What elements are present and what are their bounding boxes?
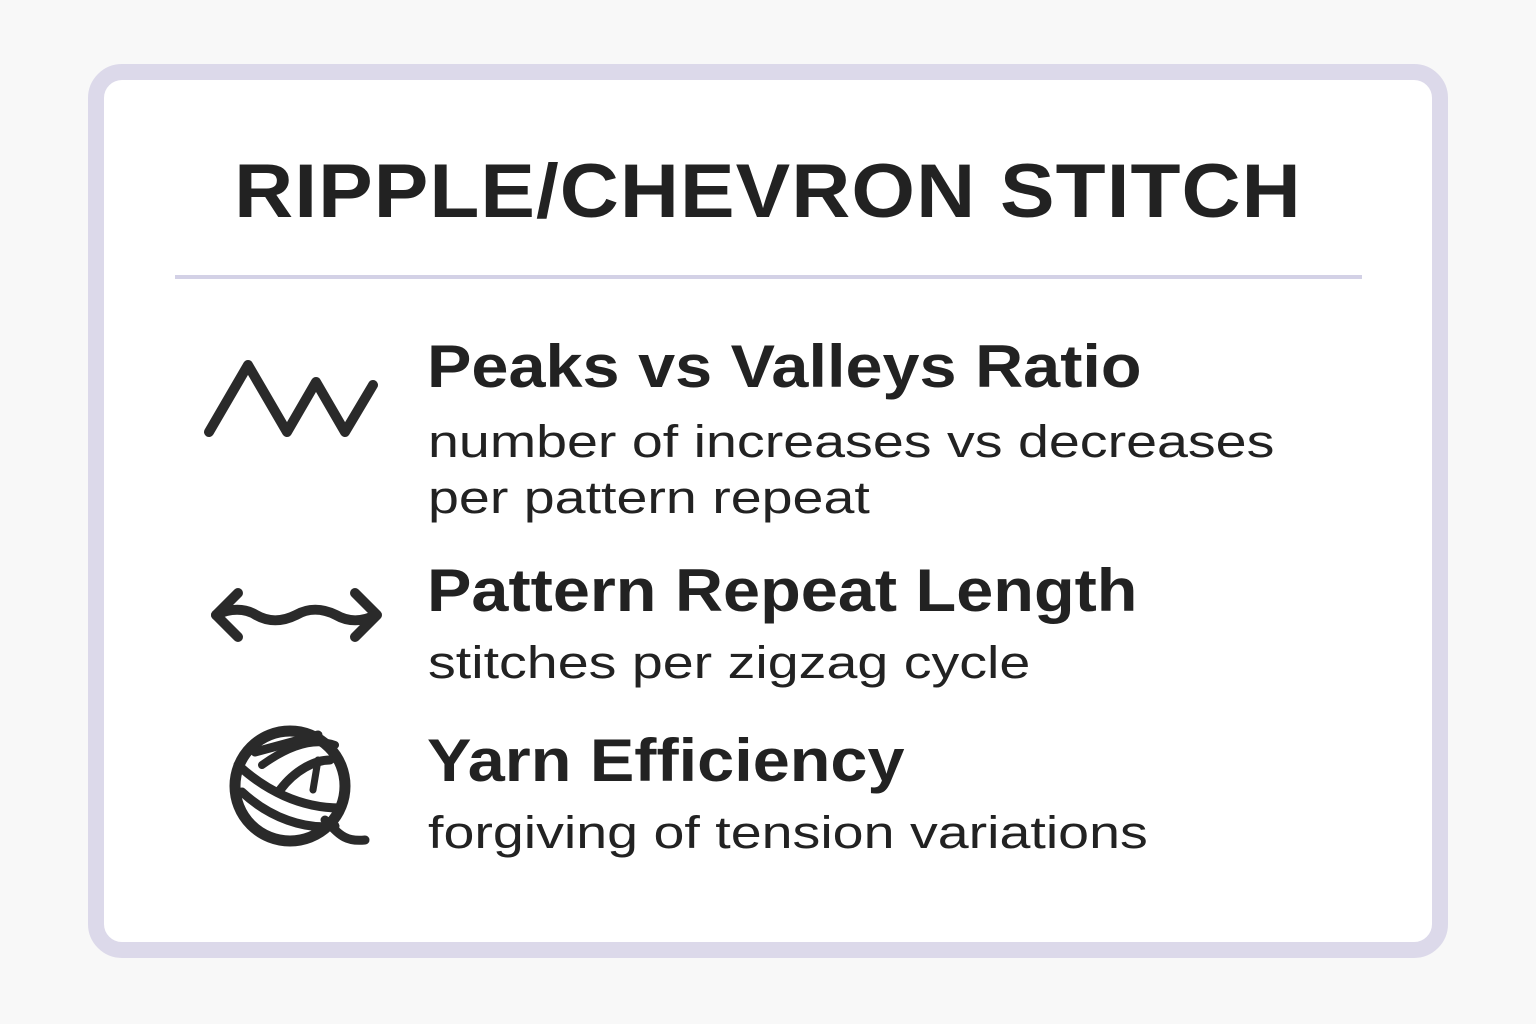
text: repeat description: stitches per zigzag cycle (428, 637, 1030, 688)
heading: peaks: Peaks vs Valleys Ratio (427, 333, 1142, 400)
heading: repeat length: Pattern Repeat Length (427, 557, 1137, 624)
text: peaks description: number of increases vs decreases (428, 416, 1274, 467)
title: RIPPLE/CHEVRON STITCH (234, 149, 1302, 234)
icon: zigzag (204, 360, 378, 437)
text: yarn description: forgiving of tension variations (428, 807, 1148, 858)
heading: yarn efficiency: Yarn Efficiency (427, 727, 905, 794)
text: peaks description: per pattern repeat (428, 472, 870, 523)
text: peaks description (428, 416, 1274, 523)
icon: yarn ball (230, 726, 370, 846)
panel: card (88, 64, 1448, 958)
icon: wavy arrow (211, 588, 382, 642)
